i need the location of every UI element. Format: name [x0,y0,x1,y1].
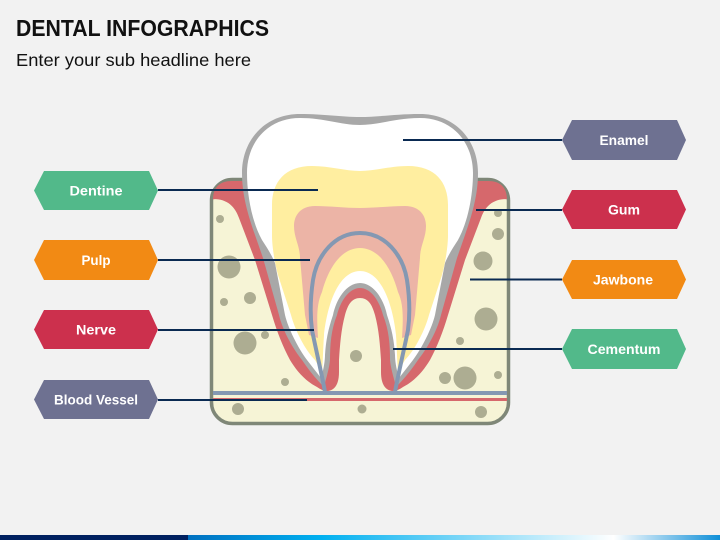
nerve: horizontal [213,398,507,401]
label: Cementum [562,329,686,369]
leader lines [158,140,562,400]
label: Dentine [34,171,158,210]
tooth diagram [212,114,508,424]
jawbone spots [216,209,504,418]
title: DENTAL INFOGRAPHICS [16,15,269,41]
label: Jawbone: Jawbone [593,272,653,288]
label: Enamel: Enamel [600,132,648,148]
nerve arch [311,233,409,392]
label: Jawbone [562,260,686,299]
cementum [242,114,478,387]
dentine [272,166,448,372]
enamel [247,118,473,378]
gum [213,181,507,391]
blood vessel: horizontal [213,391,507,395]
footer bar [0,535,720,540]
label: Pulp [34,240,158,280]
pulp [294,206,426,338]
label: Enamel [562,120,686,160]
jawbone box [212,180,508,424]
label: Dentine: Dentine [70,182,123,198]
label: Cementum: Cementum [588,341,660,357]
label: Nerve [34,310,158,349]
label: Pulp: Pulp [82,252,110,268]
label: Blood Vessel: Blood Vessel [54,392,138,408]
label: Gum: Gum [608,202,640,218]
label: Blood Vessel [34,380,158,419]
label: Gum [562,190,686,229]
label: Nerve: Nerve [76,322,116,338]
subtitle: Enter your sub headline here [16,50,251,70]
